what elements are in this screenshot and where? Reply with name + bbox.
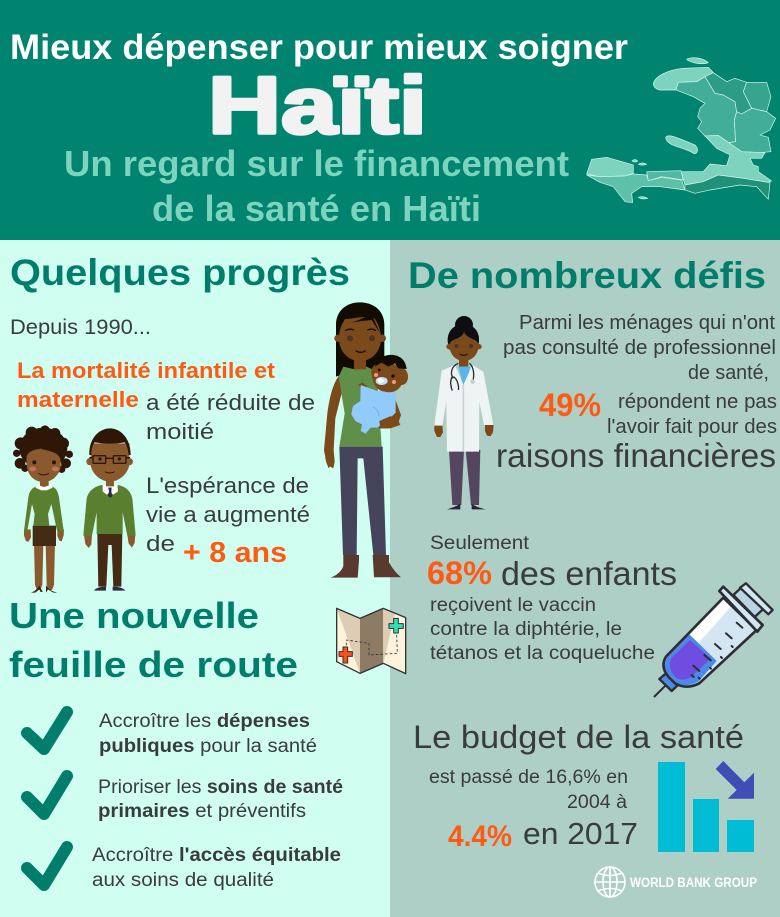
text: item 3 — [92, 845, 341, 891]
icon: check 3 — [27, 847, 67, 885]
text: health budget: est passé de 16,6% en — [429, 767, 628, 788]
text: mortality: a été réduite de — [146, 390, 315, 415]
map of Haiti — [587, 58, 776, 203]
text: households: raisons financières — [496, 437, 776, 474]
text: mortality: maternelle — [17, 387, 139, 412]
woman — [13, 425, 73, 593]
text: vaccine: des enfants — [501, 555, 677, 592]
heading: Une nouvelle feuille de route: Une nouvelle — [9, 595, 259, 636]
text: life expectancy — [146, 473, 310, 569]
text: vaccine: reçoivent le vaccin — [430, 595, 596, 616]
icon: check 1 — [27, 712, 67, 749]
list: roadmap items — [27, 711, 343, 891]
icon: doctor — [434, 316, 494, 509]
text: households: pas consulté de professionnel — [503, 337, 776, 359]
man — [83, 428, 136, 591]
heading: Quelques progrès: Quelques progrès — [10, 252, 350, 293]
text: life expectancy: L'espérance de — [146, 473, 309, 498]
text: item 2: Prioriser les soins de santé — [98, 777, 343, 798]
text: mortality: La mortalité infantile et — [17, 358, 276, 383]
subtitle: Un regard sur le financement — [64, 143, 569, 184]
heading: Haïti: Haïti — [208, 61, 427, 151]
text: health budget: Le budget de la santé — [413, 719, 744, 755]
icon: woman and man — [13, 425, 136, 593]
logo: World Bank Group: WORLD BANK GROUP — [630, 875, 757, 890]
heading: Une nouvelle feuille de route: feuille de route — [9, 644, 298, 685]
icon: syringe — [654, 583, 773, 697]
text: households: 49% — [539, 387, 601, 423]
icon: mother and baby — [324, 302, 408, 578]
logo: World Bank Group — [595, 867, 757, 897]
panel: left background — [0, 240, 390, 917]
text: item 1 — [99, 711, 317, 757]
title: Mieux dépenser pour mieux soigner — [10, 28, 628, 67]
text: item 1: Accroître les dépenses — [99, 711, 310, 732]
text: vaccine: tétanos et la coqueluche — [430, 643, 655, 664]
text: households: Parmi les ménages qui n'ont — [519, 312, 775, 334]
heading: De nombreux défis: De nombreux défis — [408, 255, 766, 296]
icon: map — [337, 608, 406, 674]
text: mortality: moitié — [146, 419, 214, 444]
panel: header — [0, 0, 780, 240]
text: vaccine: 68% — [427, 555, 492, 591]
text: item 3: aux soins de qualité — [92, 870, 274, 891]
text: item 2: primaires et préventifs — [98, 801, 306, 822]
text: households: de santé, — [688, 362, 769, 384]
subtitle: de la santé en Haïti — [152, 188, 481, 229]
arrow: decline — [716, 761, 754, 799]
text: vaccine: contre la diphtérie, le — [430, 619, 622, 640]
icon: check 2 — [27, 776, 67, 814]
text: health budget: 2004 à — [567, 792, 627, 813]
text: health budget: en 2017 — [523, 816, 638, 851]
text: households — [496, 312, 777, 474]
text: item 2 — [98, 777, 343, 822]
text: health budget: 4.4% — [448, 820, 512, 853]
panel: right background — [390, 240, 780, 917]
text: vaccine — [427, 533, 677, 664]
heading: Une nouvelle feuille de route — [9, 595, 298, 685]
text: households: l'avoir fait pour des — [607, 416, 777, 438]
text: vaccine: Seulement — [430, 533, 530, 554]
text: item 3: Accroître l'accès équitable — [92, 845, 341, 866]
bar chart icon — [658, 761, 754, 852]
text: life expectancy: vie a augmenté — [146, 502, 310, 527]
text: depuis 1990: Depuis 1990... — [10, 316, 151, 339]
text: health budget — [413, 719, 744, 853]
text: households: répondent ne pas — [618, 391, 777, 413]
text: life expectancy: de — [146, 531, 175, 556]
text: life expectancy: + 8 ans — [183, 537, 287, 569]
text: mortality — [17, 358, 315, 444]
subtitle — [64, 143, 569, 229]
text: item 1: publiques pour la santé — [99, 736, 317, 757]
